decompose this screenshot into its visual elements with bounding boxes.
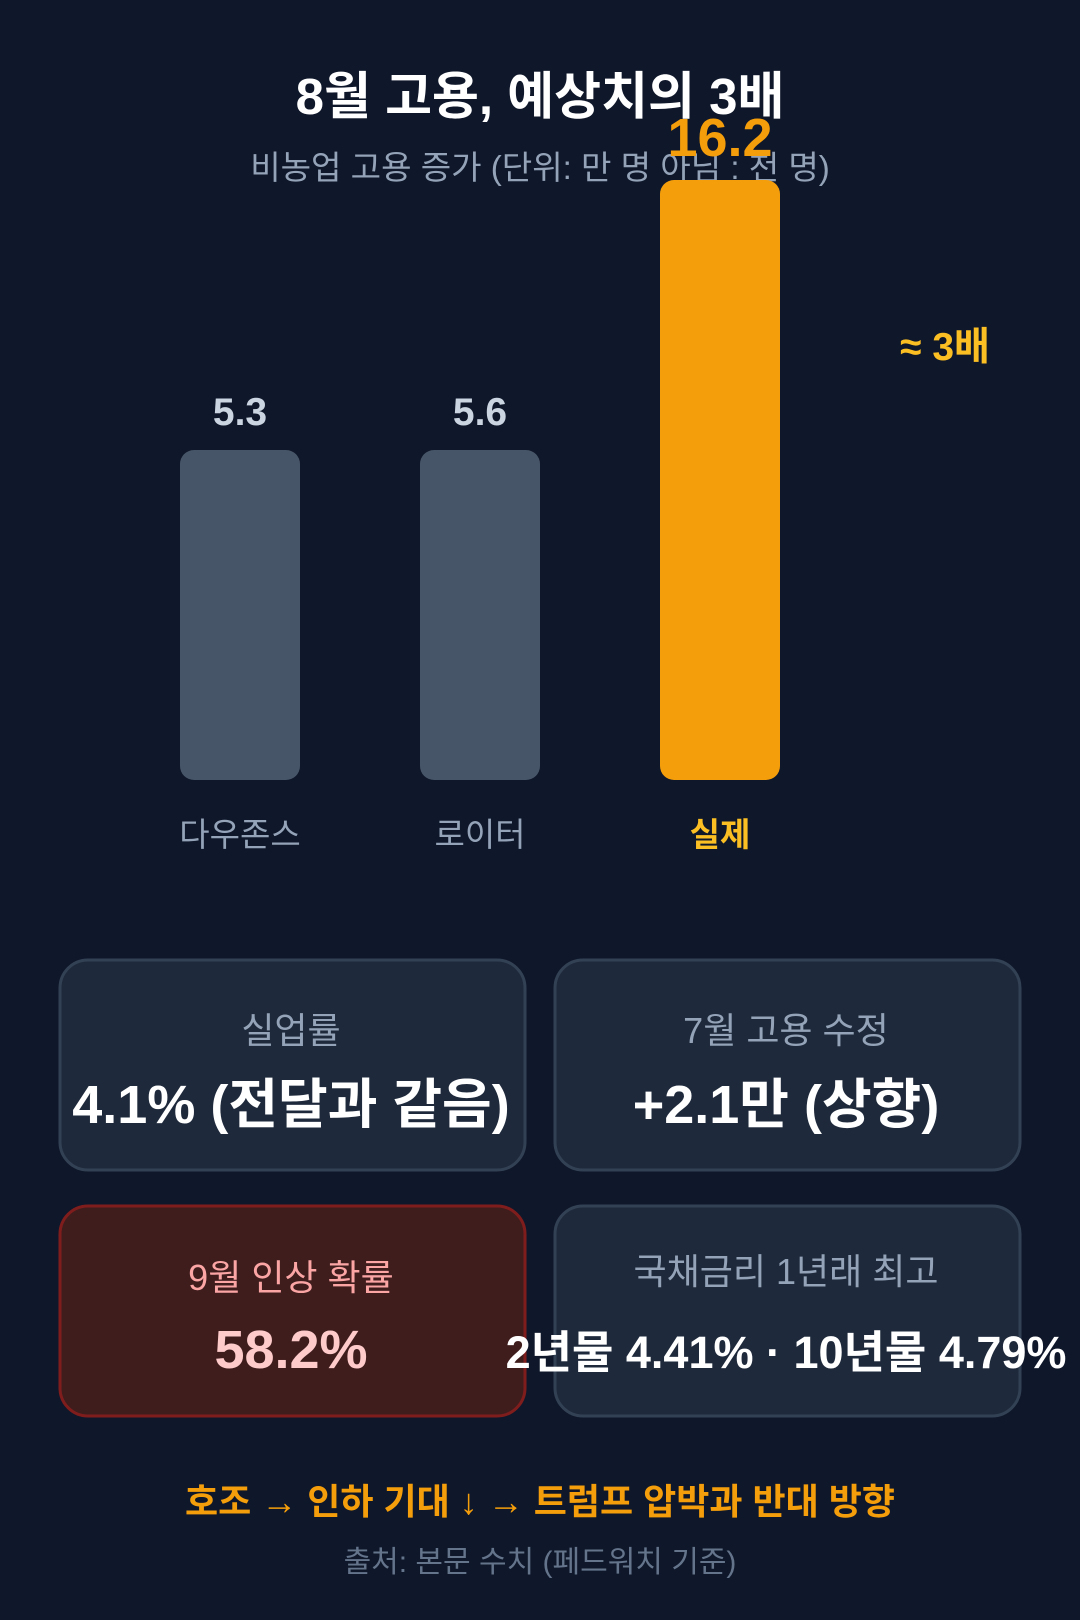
card: 실업률: 4.1% (전달과 같음) xyxy=(72,1075,510,1135)
bar: 실제: 실제 xyxy=(690,816,750,853)
bar: 다우존스: 다우존스 xyxy=(179,816,301,853)
bar: 로이터: 5.6 xyxy=(453,391,507,434)
card: 9월 인상 확률: 9월 인상 확률 xyxy=(188,1257,394,1298)
bar chart xyxy=(179,108,780,853)
bar: 실제: 16.2 xyxy=(667,108,773,168)
card: 9월 인상 확률 xyxy=(58,1204,526,1418)
card: 국채금리 1년래 최고 xyxy=(506,1204,1066,1418)
card: 7월 고용 수정: 7월 고용 수정 xyxy=(683,1010,889,1051)
card: 7월 고용 수정: +2.1만 (상향) xyxy=(633,1075,939,1135)
subtitle: 비농업 고용 증가 (단위: 만 명 아님 : 천 명) xyxy=(250,150,830,187)
bar: 로이터: 로이터 xyxy=(434,816,526,853)
card: 실업률: 실업률 xyxy=(241,1010,341,1051)
card: 국채금리 1년래 최고: 국채금리 1년래 최고 xyxy=(634,1251,938,1292)
bar: 실제 xyxy=(660,108,780,853)
card: 7월 고용 수정 xyxy=(554,958,1022,1172)
card: 실업률 xyxy=(58,958,526,1172)
source: 출처: 본문 수치 (페드워치 기준) xyxy=(344,1546,736,1579)
conclusion line: 호조 → 인하 기대 ↓ → 트럼프 압박과 반대 방향 xyxy=(185,1481,895,1522)
bar: 로이터 xyxy=(420,391,540,853)
card: 국채금리 1년래 최고: 2년물 4.41% · 10년물 4.79% xyxy=(506,1327,1066,1378)
card: 9월 인상 확률: 58.2% xyxy=(214,1320,368,1380)
bar: 다우존스: 5.3 xyxy=(213,391,267,434)
bar: 다우존스 xyxy=(179,391,301,853)
callout: about 3x: ≈ 3배 xyxy=(900,326,990,369)
title: 8월 고용, 예상치의 3배 xyxy=(296,68,784,125)
